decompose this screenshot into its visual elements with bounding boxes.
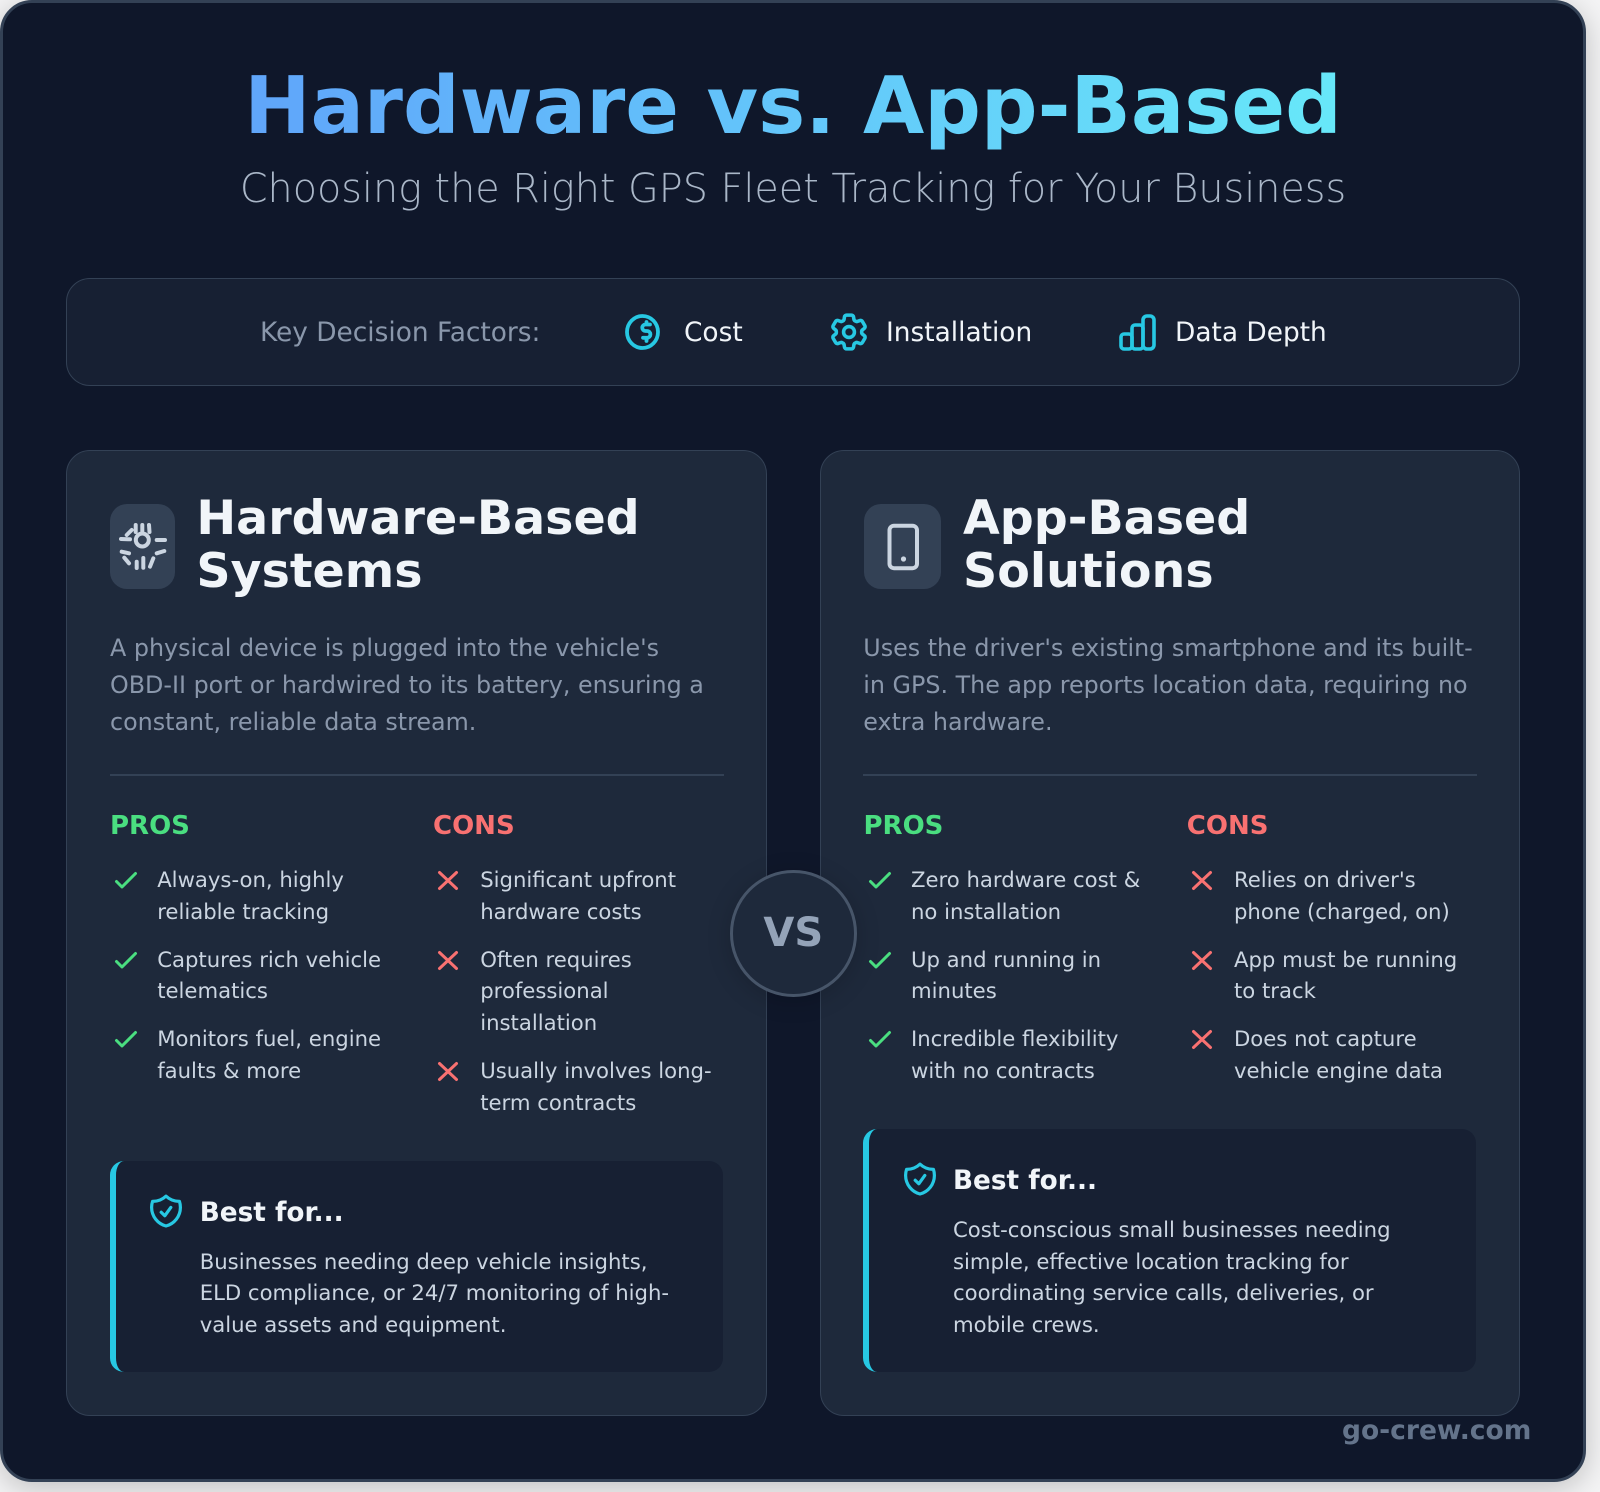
pro item 1 <box>114 867 344 924</box>
vs badge <box>730 870 856 996</box>
cons list <box>1192 867 1457 1083</box>
con item 2 <box>438 947 632 1035</box>
panel heading: Systems <box>196 544 423 598</box>
pro item 2: Up and running in <box>911 947 1101 972</box>
pros list <box>114 867 381 1083</box>
best for text: value assets and equipment. <box>200 1312 506 1337</box>
pro item 1 <box>868 867 1140 924</box>
pro item 2: telematics <box>157 978 268 1003</box>
icon: shield check <box>150 1194 182 1228</box>
description <box>863 634 1473 736</box>
pro item 3: faults & more <box>157 1058 301 1083</box>
icon: data depth bars <box>1119 314 1156 351</box>
description: extra hardware. <box>863 708 1053 736</box>
best for text: coordinating service calls, deliveries, or <box>953 1280 1374 1305</box>
best for text: Businesses needing deep vehicle insights, <box>200 1249 647 1274</box>
data depth label: Data Depth <box>1175 317 1327 348</box>
vs badge: VS <box>763 910 823 956</box>
con item 1: hardware costs <box>480 899 642 924</box>
best for heading: Best for... <box>200 1198 344 1228</box>
watermark: go-crew.com <box>1342 1415 1531 1446</box>
panel: key decision factors <box>66 278 1520 386</box>
cons heading: CONS <box>1187 811 1268 841</box>
description <box>110 634 704 736</box>
cons list <box>438 867 712 1115</box>
icon: hardware chip <box>110 504 174 588</box>
panel heading <box>196 490 640 598</box>
pro item 3: Monitors fuel, engine <box>157 1026 381 1051</box>
panel heading: Solutions <box>963 544 1214 598</box>
con item 3: vehicle engine data <box>1234 1058 1443 1083</box>
pro item 2: Captures rich vehicle <box>157 947 381 972</box>
con item 1: Relies on driver's <box>1234 867 1416 892</box>
icon: installation gear <box>831 313 867 351</box>
best for text: mobile crews. <box>953 1312 1100 1337</box>
pros list <box>868 867 1140 1083</box>
best for text: Cost-conscious small businesses needing <box>953 1217 1391 1242</box>
con item 1 <box>438 867 676 924</box>
pro item 1: Zero hardware cost & <box>911 867 1140 892</box>
subtitle: Choosing the Right GPS Fleet Tracking for Your Business <box>240 166 1346 212</box>
pro item 2 <box>868 947 1101 1003</box>
best for text: simple, effective location tracking for <box>953 1249 1349 1274</box>
pros heading: PROS <box>864 811 943 841</box>
best for text <box>953 1217 1391 1337</box>
description: Uses the driver's existing smartphone and its built- <box>863 634 1473 662</box>
factors label: Key Decision Factors: <box>260 317 540 348</box>
pro item 3: with no contracts <box>911 1058 1095 1083</box>
con item 2: App must be running <box>1234 947 1457 972</box>
installation label: Installation <box>886 317 1032 348</box>
icon: cost dollar circle <box>625 314 660 350</box>
con item 3: Does not capture <box>1234 1026 1417 1051</box>
best for text <box>200 1249 669 1337</box>
callout: best for hardware <box>110 1161 723 1372</box>
panel heading <box>963 490 1250 598</box>
best for text: ELD compliance, or 24/7 monitoring of high- <box>200 1280 669 1305</box>
callout: best for app <box>863 1129 1476 1372</box>
con item 3: Usually involves long- <box>480 1058 712 1083</box>
title: Hardware vs. App-Based <box>244 59 1342 152</box>
pro item 1: Always-on, highly <box>157 867 344 892</box>
con item 3 <box>438 1058 712 1115</box>
description: in GPS. The app reports location data, requiring no <box>863 671 1468 699</box>
cons heading: CONS <box>433 811 515 841</box>
con item 2: installation <box>480 1010 597 1035</box>
pro item 1: no installation <box>911 899 1061 924</box>
con item 3 <box>1192 1026 1443 1083</box>
pros heading: PROS <box>110 811 190 841</box>
con item 2: professional <box>480 978 609 1003</box>
cost label: Cost <box>684 317 743 348</box>
pro item 3: Incredible flexibility <box>911 1026 1118 1051</box>
description: A physical device is plugged into the vehicle's <box>110 634 659 662</box>
con item 1: phone (charged, on) <box>1234 899 1450 924</box>
con item 2: Often requires <box>480 947 632 972</box>
pro item 3 <box>868 1026 1118 1083</box>
panel heading: App-Based <box>963 490 1250 546</box>
panel heading: Hardware-Based <box>196 490 640 546</box>
con item 2 <box>1192 947 1457 1003</box>
description: constant, reliable data stream. <box>110 708 476 736</box>
con item 1: Significant upfront <box>480 867 676 892</box>
pro item 3 <box>114 1026 381 1083</box>
pro item 2 <box>114 947 381 1003</box>
con item 1 <box>1192 867 1450 924</box>
con item 2: to track <box>1234 978 1316 1003</box>
description: OBD-II port or hardwired to its battery, ensuring a <box>110 671 704 699</box>
panel: hardware-based systems <box>66 450 767 1416</box>
best for heading: Best for... <box>953 1166 1097 1196</box>
panel: app-based solutions <box>820 450 1520 1416</box>
pro item 2: minutes <box>911 978 997 1003</box>
icon: shield check <box>904 1162 936 1196</box>
con item 3: term contracts <box>480 1090 636 1115</box>
pro item 1: reliable tracking <box>157 899 329 924</box>
icon: smartphone <box>864 504 940 588</box>
